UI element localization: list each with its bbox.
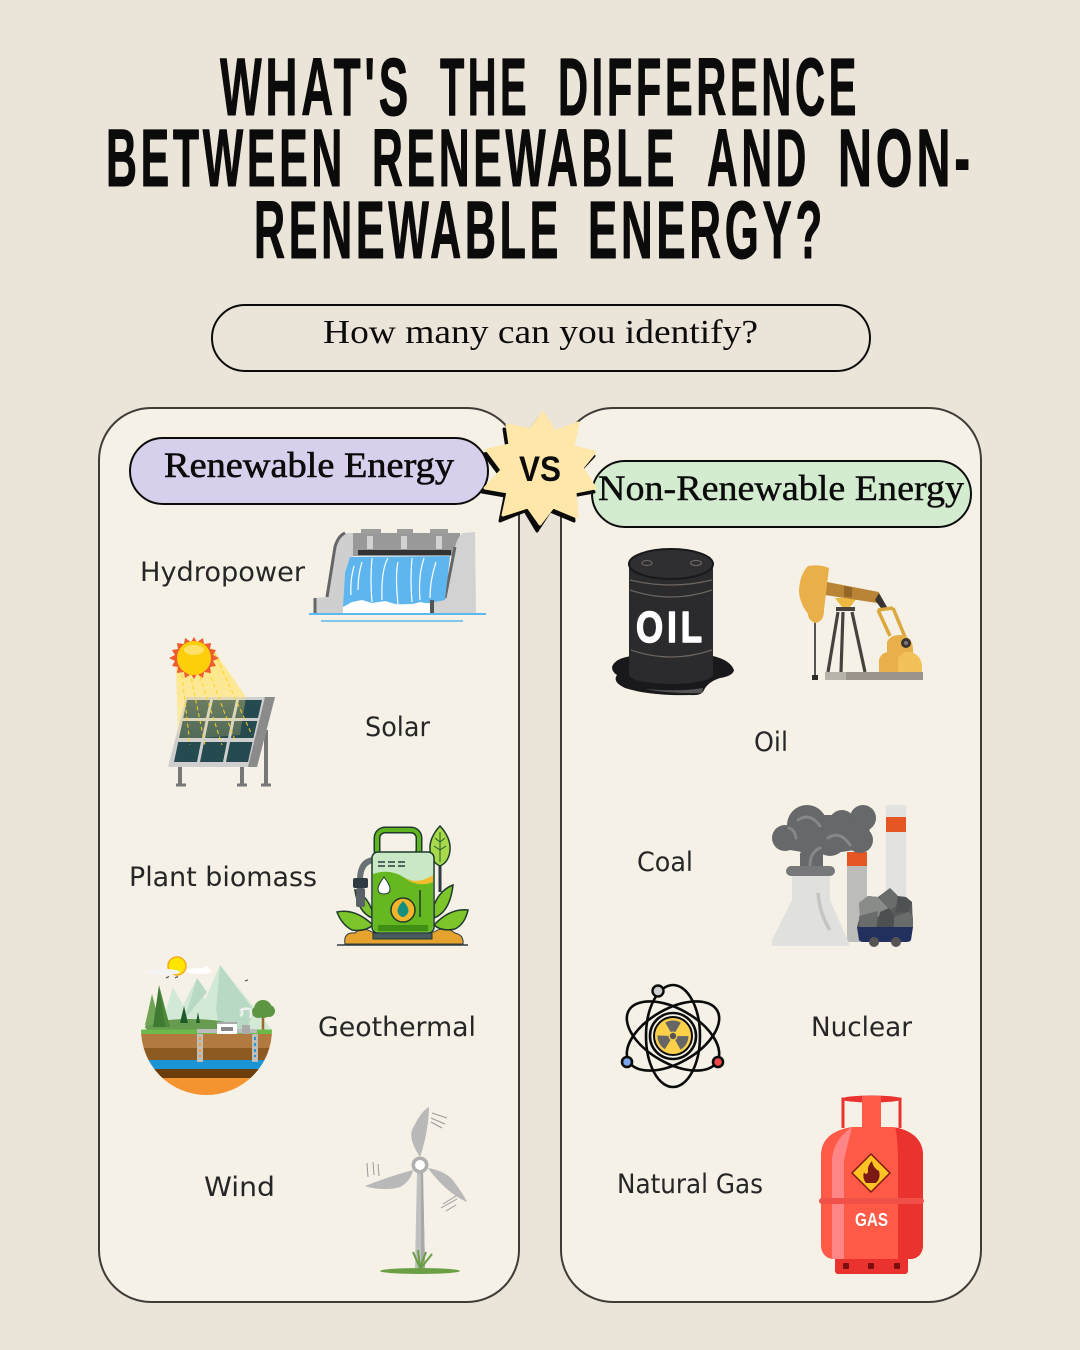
panel: non-renewable energy — [561, 408, 981, 1302]
icon: biofuel canister — [337, 826, 468, 945]
title: NON- — [838, 113, 974, 204]
icon: hydropower dam — [309, 529, 486, 621]
subtitle pill: How many can you identify? — [323, 314, 758, 351]
icon: oil barrel — [612, 549, 734, 695]
title: THE — [440, 42, 530, 133]
vs starburst badge: VS — [519, 450, 561, 489]
label: solar: Solar — [365, 712, 430, 743]
label: natural gas: Natural Gas — [617, 1169, 763, 1200]
icon: solar panel — [168, 637, 275, 785]
icon: oil barrel: OIL — [636, 603, 706, 652]
icon: wind turbine — [365, 1107, 467, 1274]
label: oil: Oil — [754, 727, 788, 758]
title: WHAT'S — [220, 42, 412, 133]
icon: gas cylinder — [819, 1096, 925, 1274]
label: geothermal: Geothermal — [318, 1012, 476, 1043]
heading: non-renewable energy — [592, 461, 971, 527]
icon: gas cylinder: GAS — [855, 1210, 888, 1230]
icon: geothermal landscape — [140, 957, 275, 1096]
icon: coal power plant — [772, 805, 913, 947]
panel: renewable energy — [99, 408, 519, 1302]
label: coal: Coal — [637, 847, 693, 878]
title: AND — [707, 113, 810, 204]
label: wind: Wind — [204, 1172, 275, 1203]
title — [106, 42, 974, 276]
icon: nuclear atom — [615, 985, 731, 1087]
title: BETWEEN — [106, 113, 346, 204]
label: hydropower: Hydropower — [140, 557, 305, 588]
heading: renewable energy: Renewable Energy — [164, 445, 454, 485]
label: nuclear: Nuclear — [811, 1012, 912, 1043]
vs starburst badge — [482, 413, 595, 531]
title: RENEWABLE — [372, 113, 678, 204]
heading: renewable energy — [130, 438, 488, 504]
label: plant biomass: Plant biomass — [129, 862, 317, 893]
title: ENERGY? — [588, 185, 826, 276]
title: RENEWABLE — [254, 185, 562, 276]
icon: oil pump jack — [799, 565, 923, 680]
heading: non-renewable energy: Non-Renewable Energy — [598, 468, 964, 508]
subtitle pill — [212, 305, 870, 371]
